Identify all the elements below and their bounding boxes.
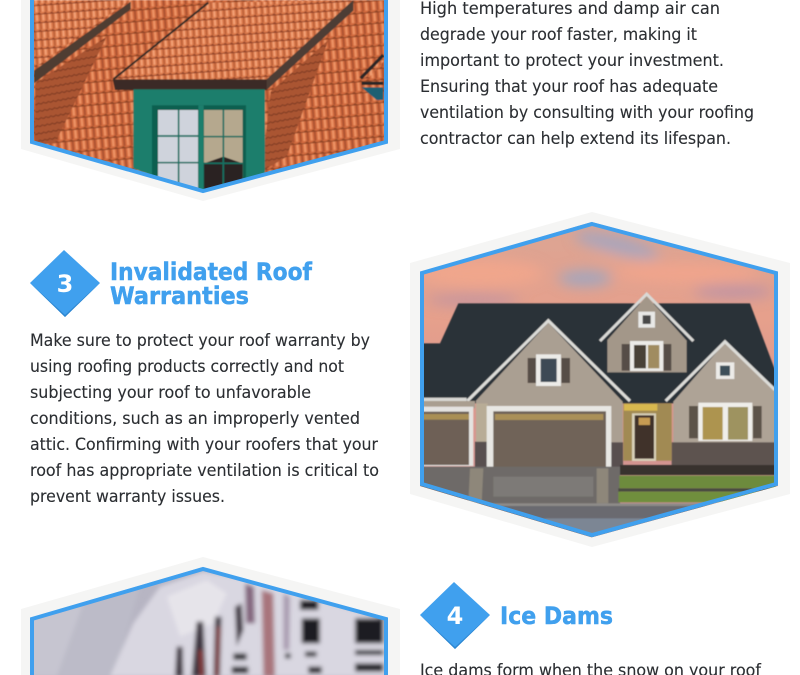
icon: number 4 diamond: 4 [447, 602, 463, 630]
body text: roof warranty: prevent warranty issues. [30, 487, 225, 506]
body text: roof warranty: subjecting your roof to unfavorable [30, 383, 311, 402]
body text: roof warranty: roof has appropriate ventilation is critical to [30, 461, 379, 480]
blue hexagon border [422, 224, 776, 535]
body text: roof warranty: conditions, such as an improperly vented [30, 409, 360, 428]
body text: high temperatures: important to protect your investment. [420, 51, 724, 70]
panel: orange tile roof photo hexagon [21, 0, 400, 201]
road [482, 504, 707, 536]
icon: number 3 diamond: 3 [57, 270, 73, 298]
body text: roof warranty [30, 331, 379, 506]
heading: invalidated roof warranties: Invalidated Roof [110, 258, 312, 286]
body text: roof warranty: Make sure to protect your roof warranty by [30, 331, 370, 350]
blue hexagon border [32, 569, 386, 675]
photo: house at dusk [417, 220, 783, 543]
photo: icicles on roof edge [30, 563, 390, 675]
hexagon halo [21, 0, 400, 201]
roof mass [420, 303, 775, 403]
garages [420, 398, 467, 401]
body text: high temperatures [420, 0, 754, 148]
stone [672, 442, 775, 470]
shrub and bed [620, 465, 775, 475]
upper gable [607, 296, 687, 372]
hexagon halo [21, 557, 400, 675]
entry [623, 403, 672, 461]
body text: roof warranty: using roofing products correctly and not [30, 357, 344, 376]
heading: invalidated roof warranties [110, 258, 312, 310]
drive [420, 467, 620, 505]
panel: icicle photo hexagon [21, 557, 400, 675]
body text: high temperatures: contractor can help extend its lifespan. [420, 129, 731, 148]
heading: invalidated roof warranties: Warranties [110, 282, 249, 310]
heading: ice dams: Ice Dams [500, 602, 613, 630]
body text: high temperatures: degrade your roof faster, making it [420, 25, 698, 44]
body text: high temperatures: ventilation by consulting with your roofing [420, 103, 754, 122]
blue hexagon border [32, 0, 386, 191]
icon: number 3 diamond [30, 250, 100, 317]
body text: high temperatures: Ensuring that your roof has adequate [420, 77, 718, 96]
body text: roof warranty: attic. Confirming with your roofers that your [30, 435, 378, 454]
lawn [619, 476, 776, 488]
hexagon halo [410, 212, 790, 547]
left gable [476, 323, 623, 443]
photo: tile roof with green dormer [30, 0, 390, 193]
panel: house photo hexagon [410, 212, 790, 547]
icon: number 4 diamond [420, 582, 490, 649]
right gable [673, 343, 775, 443]
